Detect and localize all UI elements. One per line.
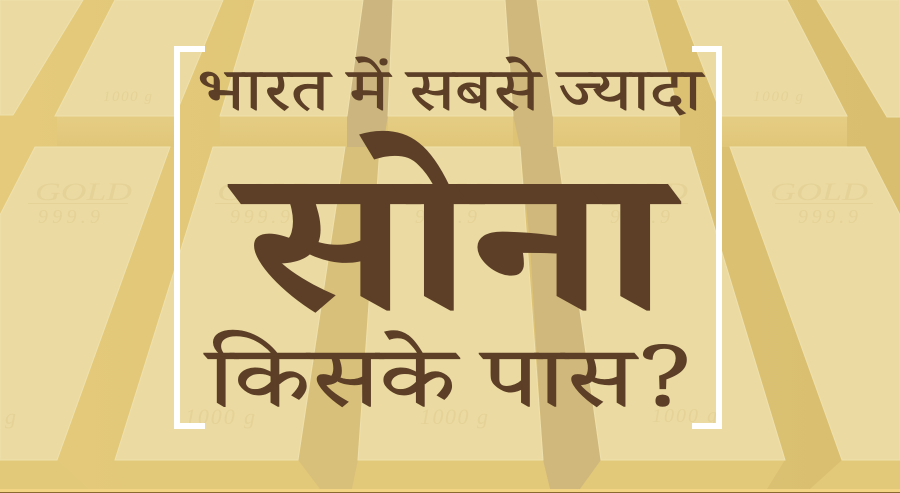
embossed bar markings: GOLD — [217, 179, 317, 206]
embossed bar markings: 1000 g — [652, 405, 717, 427]
embossed bar markings: 1000 g — [420, 404, 488, 429]
embossed bar markings: 999.9 — [610, 206, 670, 228]
title line 1: भारत में सबसे ज्यादा — [197, 54, 706, 148]
title line 3: किसके पास? — [203, 328, 693, 460]
bottom row front faces — [0, 460, 900, 489]
embossed bar markings: 999.9 — [38, 206, 100, 228]
embossed bar markings: 1000 g — [753, 89, 804, 105]
embossed bar markings: 1000 g — [185, 404, 255, 429]
embossed bar markings: 999.9 — [230, 206, 290, 228]
white corner bracket: right — [692, 49, 719, 426]
white corner bracket: left — [177, 49, 205, 426]
title block — [197, 54, 706, 460]
embossed bar markings: g — [5, 404, 16, 429]
embossed bar markings: GOLD — [770, 179, 868, 206]
embossed bar markings: GOLD — [400, 179, 500, 206]
top row bar tops — [0, 0, 900, 117]
grey shadowed gaps — [298, 0, 393, 489]
embossed bar markings: 999.9 — [798, 206, 858, 228]
embossed bar markings: GOLD — [593, 179, 688, 206]
title line 2: सोना — [228, 123, 681, 434]
top row front faces — [57, 116, 847, 147]
bottom row bar tops — [0, 147, 900, 460]
embossed bar markings: 999.9 — [415, 206, 477, 228]
embossed bar markings: GOLD — [35, 179, 132, 206]
embossed bar markings — [5, 89, 873, 429]
embossed bar markings: 1000 g — [103, 89, 152, 105]
bottom edge strip — [0, 489, 900, 492]
